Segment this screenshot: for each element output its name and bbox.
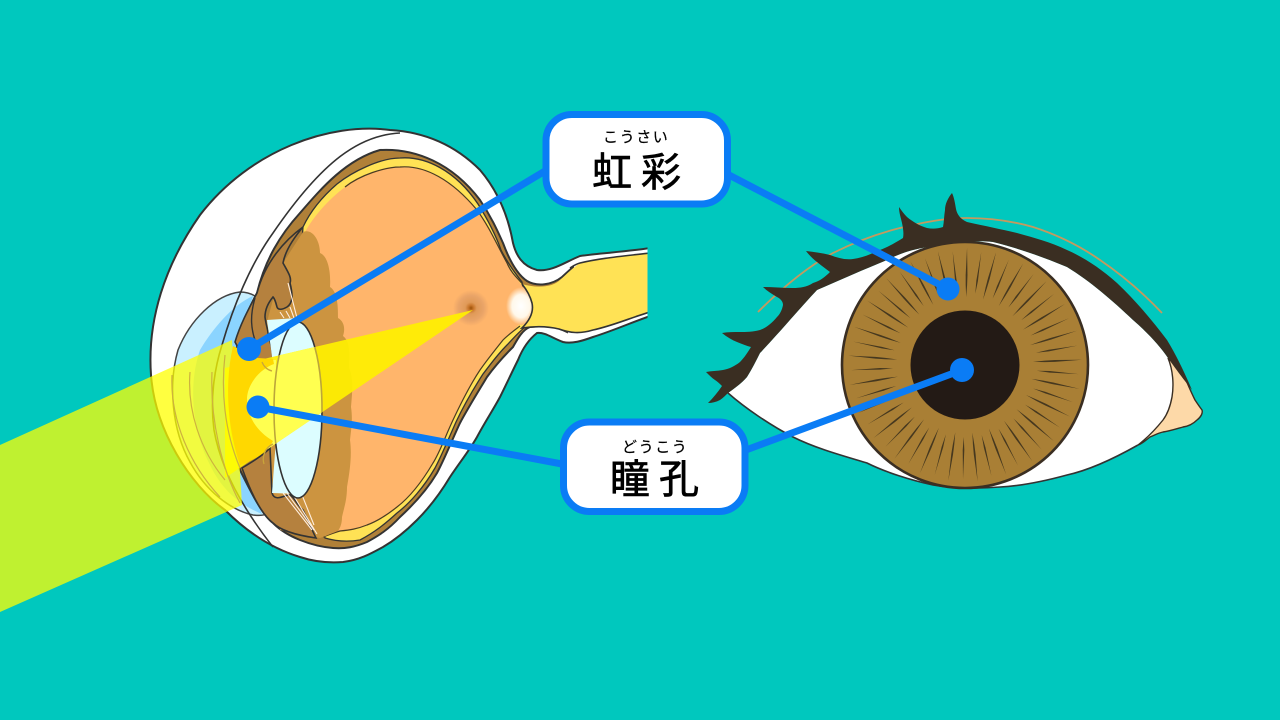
choroid	[230, 150, 573, 548]
marker dot: iris on cross-section	[237, 337, 261, 361]
iris under the light beam	[228, 346, 274, 465]
cornea	[173, 292, 268, 515]
leader line: pupil on cross-section	[258, 407, 562, 464]
pupil	[910, 310, 1020, 420]
cone fill	[225, 310, 473, 478]
optic nerve edge	[522, 253, 650, 333]
lens capsule	[267, 318, 315, 494]
lens	[274, 322, 322, 498]
structures seen through the beam	[172, 355, 240, 503]
cross-section of the eyeball	[0, 129, 650, 612]
light cone inside the eye	[225, 310, 473, 478]
furigana: こうさい	[603, 129, 669, 146]
eyelid crease	[758, 218, 1162, 313]
callout box	[564, 422, 745, 512]
front view of the eye	[706, 193, 1202, 488]
marker dot: iris on front view	[936, 278, 960, 300]
anterior chamber shading	[193, 296, 262, 514]
iris lower	[242, 448, 316, 538]
iris radial lines	[848, 248, 1082, 481]
callout: pupil	[564, 422, 745, 512]
eye white	[728, 241, 1173, 488]
iris folds	[262, 362, 273, 464]
lower lid line	[728, 393, 1138, 488]
furigana: どうこう	[622, 439, 688, 456]
caruncle	[1138, 358, 1202, 445]
leader line: iris on front view	[729, 175, 948, 289]
term: 瞳孔	[610, 458, 708, 502]
callout: iris	[546, 114, 728, 204]
fovea	[453, 290, 489, 326]
infographic canvas	[0, 111, 1203, 612]
retina	[290, 158, 528, 541]
optic nerve	[522, 253, 650, 333]
sclera and optic nerve sheath	[150, 129, 650, 562]
upper lid and eyelashes	[706, 193, 1192, 403]
iris upper	[235, 227, 303, 366]
optic disc	[506, 287, 536, 325]
term: 虹彩	[592, 151, 690, 195]
sclera edge line	[212, 133, 400, 547]
zonule fibres	[280, 283, 317, 534]
callout box	[546, 114, 728, 204]
pupil area through the cone	[247, 360, 276, 450]
marker dot: pupil on front view	[950, 358, 974, 382]
ciliary body	[262, 231, 352, 538]
retina inner line	[323, 167, 524, 537]
marker dot: pupil on cross-section	[246, 396, 270, 418]
leader line: pupil on front view	[746, 370, 962, 450]
leader line: iris on cross-section	[249, 171, 545, 349]
lens through the cone	[273, 346, 323, 444]
light beam	[0, 340, 242, 612]
iris inner line	[252, 298, 258, 348]
vitreous body	[290, 167, 530, 537]
iris	[842, 242, 1088, 488]
